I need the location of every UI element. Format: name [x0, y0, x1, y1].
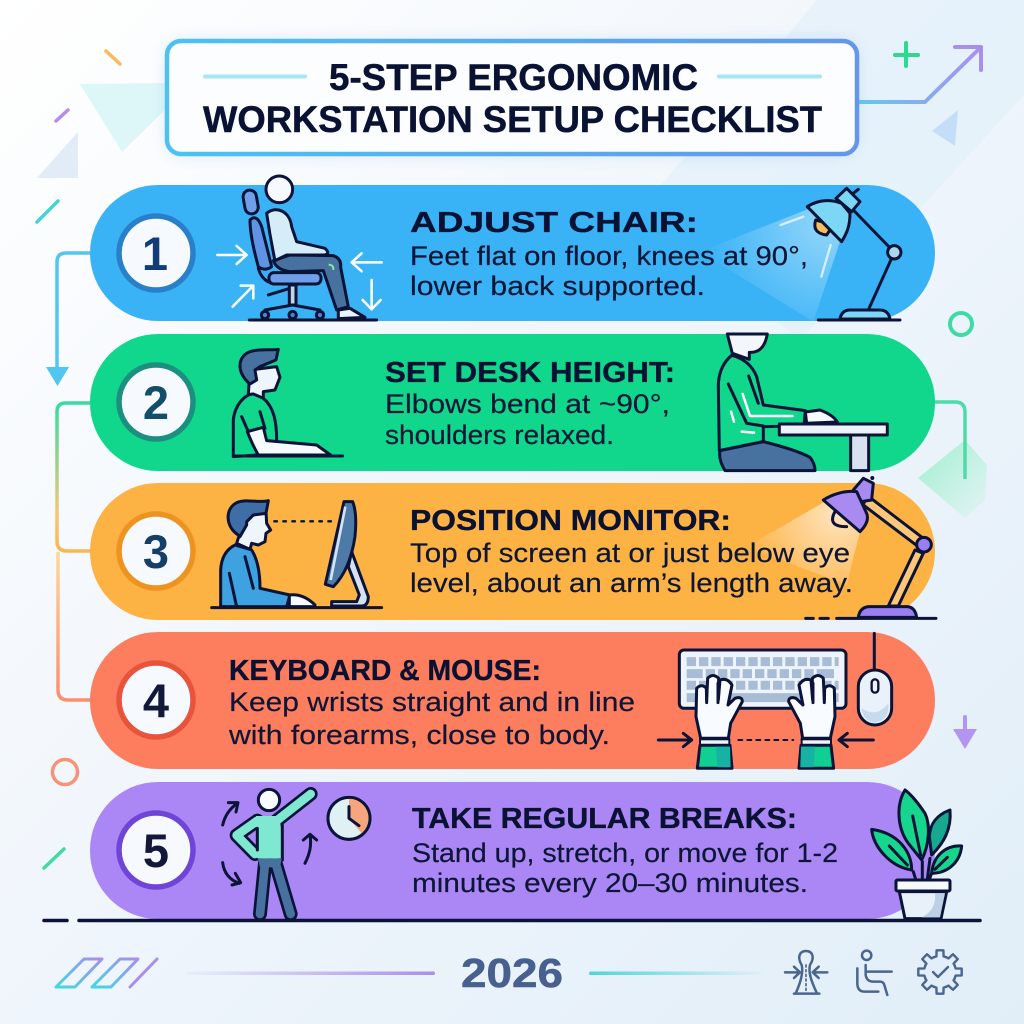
text: position monitor: level, about an arm’s length away. — [410, 568, 853, 598]
icon: potted plant — [872, 790, 962, 919]
text: keyboard and mouse: Keep wrists straight and in line — [229, 687, 635, 717]
arrow: top right up-trend — [858, 47, 981, 102]
text: take regular breaks: Stand up, stretch, or move for 1-2 — [412, 838, 838, 868]
left hand — [696, 675, 742, 768]
text: position monitor: Top of screen at or just below eye — [410, 538, 850, 568]
text: set desk height: shoulders relaxed. — [385, 420, 614, 450]
step number 2 — [119, 365, 193, 439]
arrow: connector step 2 to step 3 — [57, 403, 90, 551]
arrow: connector step 4 to step 5 — [953, 620, 977, 749]
text: set desk height: SET DESK HEIGHT: — [385, 357, 675, 389]
footer line left — [186, 972, 435, 975]
arrow: connector step 2 to right — [933, 402, 965, 479]
text: keyboard and mouse: with forearms, close to body. — [228, 720, 610, 750]
icon: person stretching with clock — [223, 789, 370, 914]
step number 3: 3 — [143, 525, 169, 578]
step number 1: 1 — [142, 227, 168, 280]
text: position monitor — [410, 505, 853, 598]
icon: person viewing monitor — [212, 501, 382, 608]
icon: person seated on chair — [217, 176, 382, 320]
icon: seated posture — [857, 951, 892, 995]
text: keyboard and mouse: KEYBOARD & MOUSE: — [229, 655, 541, 687]
step number 5 — [119, 813, 193, 887]
right hand — [789, 675, 835, 768]
title: WORKSTATION SETUP CHECKLIST — [203, 98, 822, 140]
step number 3 — [119, 514, 193, 588]
floor line — [44, 919, 980, 922]
icon: person side profile — [233, 349, 343, 457]
panel: step 5 take regular breaks — [44, 782, 980, 920]
arrow: connector step 3 to step 4 — [58, 552, 90, 700]
text: adjust chair: Feet flat on floor, knees at 90°, — [410, 241, 808, 271]
text: take regular breaks: TAKE REGULAR BREAKS: — [412, 803, 797, 835]
icon: plus — [895, 43, 918, 66]
step number 1 — [119, 216, 193, 290]
icon: person typing at desk — [718, 334, 887, 471]
icon: keyboard, hands and mouse — [658, 633, 892, 768]
text: adjust chair: lower back supported. — [410, 271, 705, 301]
footer decoration: parallelograms — [56, 959, 157, 987]
text: take regular breaks — [412, 803, 838, 898]
panel: step 1 adjust chair — [90, 176, 935, 322]
panel: step 2 set desk height — [90, 334, 935, 471]
footer line right — [589, 972, 764, 975]
lamp: blue desk lamp — [700, 188, 901, 322]
title: 5-STEP ERGONOMIC — [329, 56, 698, 98]
panel: step 3 position monitor — [90, 476, 936, 620]
lamp: purple desk lamp — [747, 476, 936, 618]
icon: gear with check — [918, 950, 962, 994]
text: keyboard and mouse — [228, 655, 635, 750]
text: position monitor: POSITION MONITOR: — [410, 505, 731, 537]
title — [167, 41, 857, 154]
text: take regular breaks: minutes every 20–30 minutes. — [412, 868, 808, 898]
text: adjust chair: ADJUST CHAIR: — [410, 207, 698, 239]
text: set desk height — [385, 357, 675, 450]
step number 2: 2 — [143, 376, 169, 429]
step number 4: 4 — [143, 674, 169, 727]
panel: step 4 keyboard and mouse — [90, 632, 935, 769]
step number 5: 5 — [143, 824, 169, 877]
text: set desk height: Elbows bend at ~90°, — [385, 389, 670, 419]
icon: spine — [785, 951, 827, 994]
text: adjust chair — [410, 207, 808, 301]
step number 4 — [119, 663, 193, 737]
footer year: 2026 — [461, 950, 563, 996]
arrow: connector step 1 to step 2 — [46, 253, 90, 386]
